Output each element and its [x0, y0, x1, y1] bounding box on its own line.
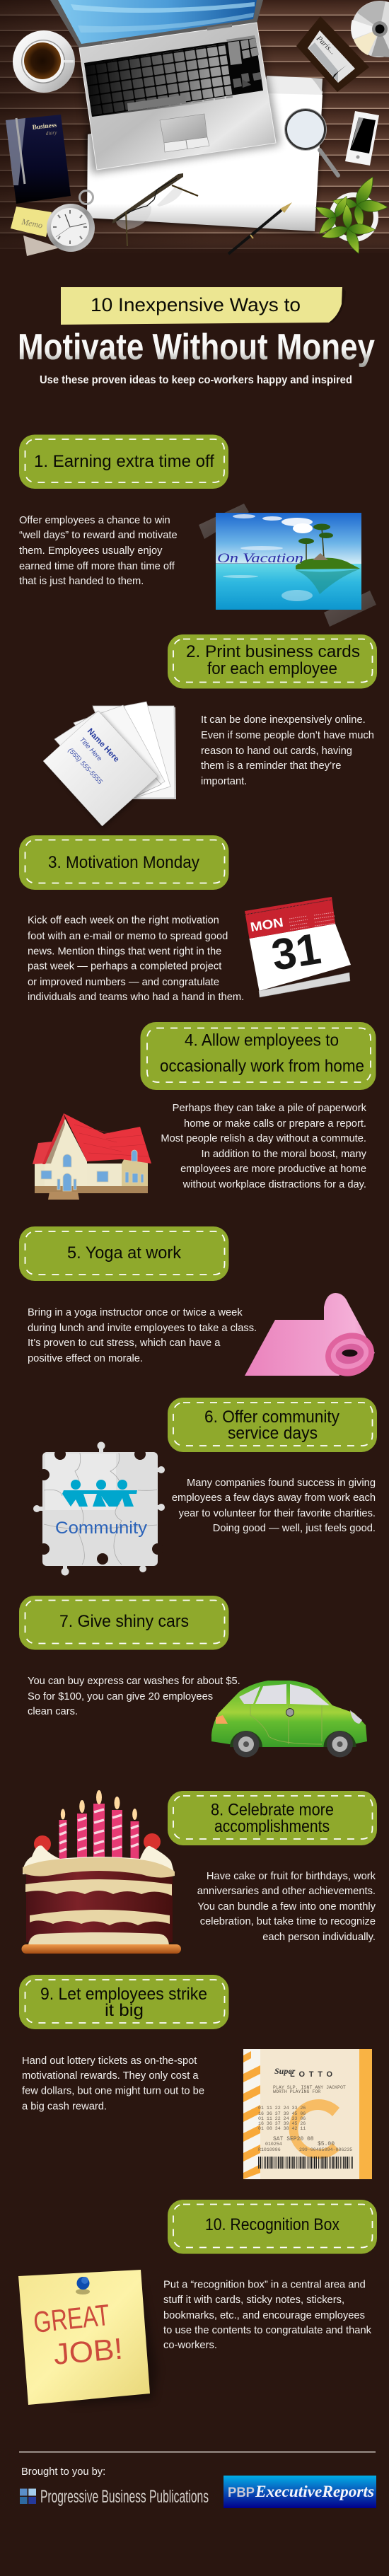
text: tip 7 body: You can buy express car washes for about $5. — [28, 1676, 240, 1687]
icon: desk calendar — [245, 897, 351, 997]
text: credit: Brought to you by: — [21, 2466, 105, 2478]
text: tip 10 body: stuff it with cards, sticky notes, stickers, — [163, 2294, 344, 2306]
icon: potted plant — [314, 174, 388, 255]
image: lottery ticket: LOTTO — [290, 2070, 332, 2079]
icon: fountain pen — [228, 202, 292, 254]
heading badge 9: 9. Let employees strike — [40, 1985, 207, 2004]
icon: picture frame — [296, 16, 369, 92]
icon: eyeglasses — [112, 173, 198, 246]
icon: community puzzle — [33, 1441, 165, 1576]
icon: desk calendar: MON — [249, 915, 284, 934]
panel: tip 2 — [43, 634, 377, 829]
icon: coffee cup — [13, 30, 75, 93]
text: tip 9 body: a big cash reward. — [22, 2101, 107, 2113]
panel: tip 7 — [19, 1596, 367, 1757]
text: tip 9 body: few dollars, but one might turn out to be — [22, 2085, 204, 2096]
image: lottery ticket: WORTH PLAYING FOR — [273, 2089, 320, 2094]
image: lottery ticket: 01 11 22 24 33 26 — [258, 2106, 306, 2111]
icon: business diary — [6, 115, 71, 204]
heading badge 8: accomplishments — [214, 1817, 330, 1836]
heading badge 1: 1. Earning extra time off — [34, 452, 214, 471]
image: lottery ticket: R1010986 — [258, 2147, 281, 2152]
image: lottery ticket: 16 36 37 39 45 06 — [258, 2111, 306, 2116]
heading badge 6: 6. Offer community — [204, 1408, 339, 1427]
image: lottery ticket: Super — [274, 2066, 296, 2076]
title banner: sticky note — [61, 287, 346, 325]
icon: green car — [211, 1681, 367, 1757]
image: on vacation beach: On Vacation — [217, 551, 303, 566]
text: tip 5 body: positive effect on morale. — [28, 1353, 143, 1364]
heading badge 6: service days — [228, 1424, 318, 1443]
heading badge 2 — [168, 634, 377, 689]
heading badge 4 — [140, 1022, 376, 1090]
text: tip 1 body: Offer employees a chance to win — [19, 515, 170, 526]
heading badge 10 — [168, 2200, 377, 2253]
icon: smartphone — [345, 111, 379, 166]
text: tip 6 body: year to volunteer for their favorite charities. — [179, 1508, 376, 1519]
text: tip 2 body: important. — [201, 776, 247, 787]
text: tip 6 body: employees a few days away from work each — [172, 1492, 376, 1504]
heading badge 9 — [19, 1975, 229, 2029]
text: tip 7 body: clean cars. — [28, 1706, 78, 1717]
image: lottery ticket: 010254 — [265, 2142, 282, 2147]
logo: Progressive Business Publications — [20, 2487, 209, 2507]
image: lottery ticket: 16 36 37 39 45 26 — [258, 2121, 306, 2126]
text: tip 3 body: Kick off each week on the right motivation — [28, 915, 219, 927]
logo: PBP Executive Reports — [223, 2476, 376, 2508]
footer — [19, 2452, 376, 2508]
text: tip 9 body: Hand out lottery tickets as on-the-spot — [22, 2055, 197, 2067]
heading badge 8: 8. Celebrate more — [211, 1801, 334, 1819]
icon: laptop — [50, 0, 280, 173]
image: lottery ticket: 299-00485094-086235 — [299, 2147, 352, 2152]
panel: tip 4 — [33, 1022, 376, 1200]
logo: Progressive Business Publications: Progressive Business Publications — [40, 2487, 209, 2507]
panel: tip 9 — [19, 1975, 372, 2179]
panel: tip 1 — [19, 434, 376, 627]
logo: PBP Executive Reports: ExecutiveReports — [255, 2483, 374, 2500]
panel: tip 8 — [21, 1790, 377, 1954]
text: tip 2 body: reason to hand out cards, having — [201, 745, 352, 757]
icon: paper sheets — [85, 76, 325, 234]
image: lottery ticket: 01 08 34 38 42 11 — [258, 2126, 306, 2131]
icon: pocket watch — [47, 191, 95, 252]
image: on vacation beach — [199, 504, 376, 627]
icon: stack of business cards: Title Here — [78, 736, 103, 762]
heading badge 5: 5. Yoga at work — [67, 1243, 182, 1263]
text: tip 1 body: that is just handed to them. — [19, 576, 144, 587]
text: tip 8 body: celebration, but take time to recognize — [200, 1916, 376, 1927]
heading badge 4: occasionally work from home — [160, 1057, 364, 1076]
text: tip 4 body: employees are more productive at home — [180, 1164, 366, 1175]
icon: community puzzle: Community — [55, 1519, 147, 1538]
text: tip 4 body: without workplace distractions for a day. — [182, 1179, 366, 1190]
icon: memo note — [11, 207, 60, 256]
image: lottery ticket: $5.00 — [318, 2141, 335, 2147]
icon: great job sticky note: JOB! — [52, 2332, 124, 2371]
text: tip 8 body: Have cake or fruit for birthdays, work — [207, 1871, 376, 1882]
text: tip 4 body: Most people relish a day without a commute. — [161, 1133, 366, 1144]
text: tip 5 body: during lunch and invite employees to take a class. — [28, 1323, 257, 1334]
text: tip 2 body: them is a reminder that they’re — [201, 760, 341, 772]
heading badge 9: it big — [105, 2001, 144, 2020]
heading badge 3 — [19, 835, 229, 890]
text: tip 2 body: Even if some people don’t have much — [201, 730, 374, 741]
heading badge 2: 2. Print business cards — [186, 642, 360, 661]
text: tip 10 body: co-workers. — [163, 2340, 217, 2351]
text: tip 8 body: each person individually. — [262, 1932, 376, 1943]
text: tip 3 body: individuals and teams who had a hand in them. — [28, 992, 244, 1003]
image: lottery ticket: SAT SEP20 08 — [273, 2136, 314, 2142]
icon: stack of business cards: (555) 555-5555 — [66, 747, 104, 787]
text: tip 1 body: them. Employees usually enjoy — [19, 545, 163, 557]
icon: business diary: diary — [45, 129, 58, 137]
text: tip 9 body: motivational rewards. They only cost a — [22, 2070, 199, 2082]
text: tip 7 body: So for $100, you can give 20 employees — [28, 1691, 213, 1702]
text: tip 3 body: or improved numbers — and congratulate — [28, 977, 219, 988]
text: tip 3 body: past week — perhaps a completed project — [28, 961, 221, 973]
image: lottery ticket: PLAY SLP. ISNT ANY JACKPOT — [273, 2085, 346, 2090]
text: tip 6 body: Doing good — well, just feels good. — [213, 1523, 376, 1534]
text: tip 1 body: “well days” to reward and motivate — [19, 530, 178, 541]
icon: desk calendar: 31 — [268, 924, 324, 980]
text: tip 1 body: earned time off more than time off — [19, 561, 175, 572]
icon: rolled yoga mat — [245, 1293, 381, 1383]
heading badge 5 — [19, 1226, 229, 1281]
icon: business diary: Business — [32, 122, 57, 132]
logo: PBP Executive Reports: PBP — [228, 2485, 255, 2500]
subtitle: Use these proven ideas to keep co-workers happy and inspired — [40, 374, 352, 386]
heading badge 10: 10. Recognition Box — [205, 2215, 339, 2234]
icon: stack of business cards: Name Here — [86, 727, 121, 764]
text: tip 4 body: Perhaps they can take a pile of paperwork — [173, 1103, 367, 1114]
text: tip 10 body: bookmarks, etc., and encourage employees — [163, 2310, 365, 2321]
heading badge 7 — [19, 1596, 229, 1649]
heading badge 8 — [168, 1791, 377, 1845]
heading badge 2: for each employee — [207, 659, 337, 678]
heading badge 1 — [19, 434, 228, 489]
text: tip 4 body: home or make calls or prepare a report. — [184, 1118, 366, 1130]
text: tip 8 body: You can bundle a few into one monthly — [197, 1901, 376, 1913]
panel: tip 3 — [19, 835, 351, 1003]
heading badge 4: 4. Allow employees to — [185, 1031, 339, 1050]
panel: tip 6 — [33, 1398, 377, 1576]
icon: birthday cake — [21, 1790, 181, 1954]
icon: memo note: Memo — [20, 216, 44, 231]
heading badge 7: 7. Give shiny cars — [59, 1612, 189, 1631]
text: tip 3 body: news. Mention things that went right in the — [28, 946, 221, 958]
icon: stack of business cards — [43, 702, 176, 829]
image: lottery ticket — [243, 2049, 372, 2179]
title banner: sticky note: 10 Inexpensive Ways to — [91, 294, 301, 315]
icon: magnifying glass — [284, 109, 338, 175]
text: tip 10 body: Put a “recognition box” in a central area and — [163, 2279, 366, 2290]
icon: great job sticky note: GREAT — [32, 2298, 111, 2339]
image: lottery ticket: 01 11 22 24 33 06 — [258, 2116, 306, 2121]
heading badge 6 — [168, 1398, 377, 1452]
text: tip 3 body: foot with an e-mail or memo to spread good — [28, 931, 228, 942]
text: tip 2 body: It can be done inexpensively online. — [201, 714, 366, 726]
text: tip 4 body: In addition to the moral boost, many — [201, 1149, 367, 1160]
text: tip 10 body: to use the contents to congratulate and thank — [163, 2325, 372, 2336]
icon: house — [33, 1113, 151, 1200]
panel: tip 10 — [18, 2200, 377, 2405]
panel: tip 5 — [19, 1226, 381, 1383]
text: tip 5 body: It’s proven to cut stress, which can have a — [28, 1338, 221, 1349]
heading badge 3: 3. Motivation Monday — [48, 853, 199, 872]
text: tip 5 body: Bring in a yoga instructor once or twice a week — [28, 1307, 243, 1318]
text: tip 8 body: anniversaries and other achievements. — [197, 1886, 376, 1897]
text: tip 6 body: Many companies found success in giving — [187, 1478, 376, 1489]
icon: picture frame: Paris... — [314, 34, 337, 56]
icon: compact disc — [351, 1, 389, 57]
icon: great job sticky note — [18, 2270, 157, 2405]
header illustration: office desk — [0, 0, 389, 256]
